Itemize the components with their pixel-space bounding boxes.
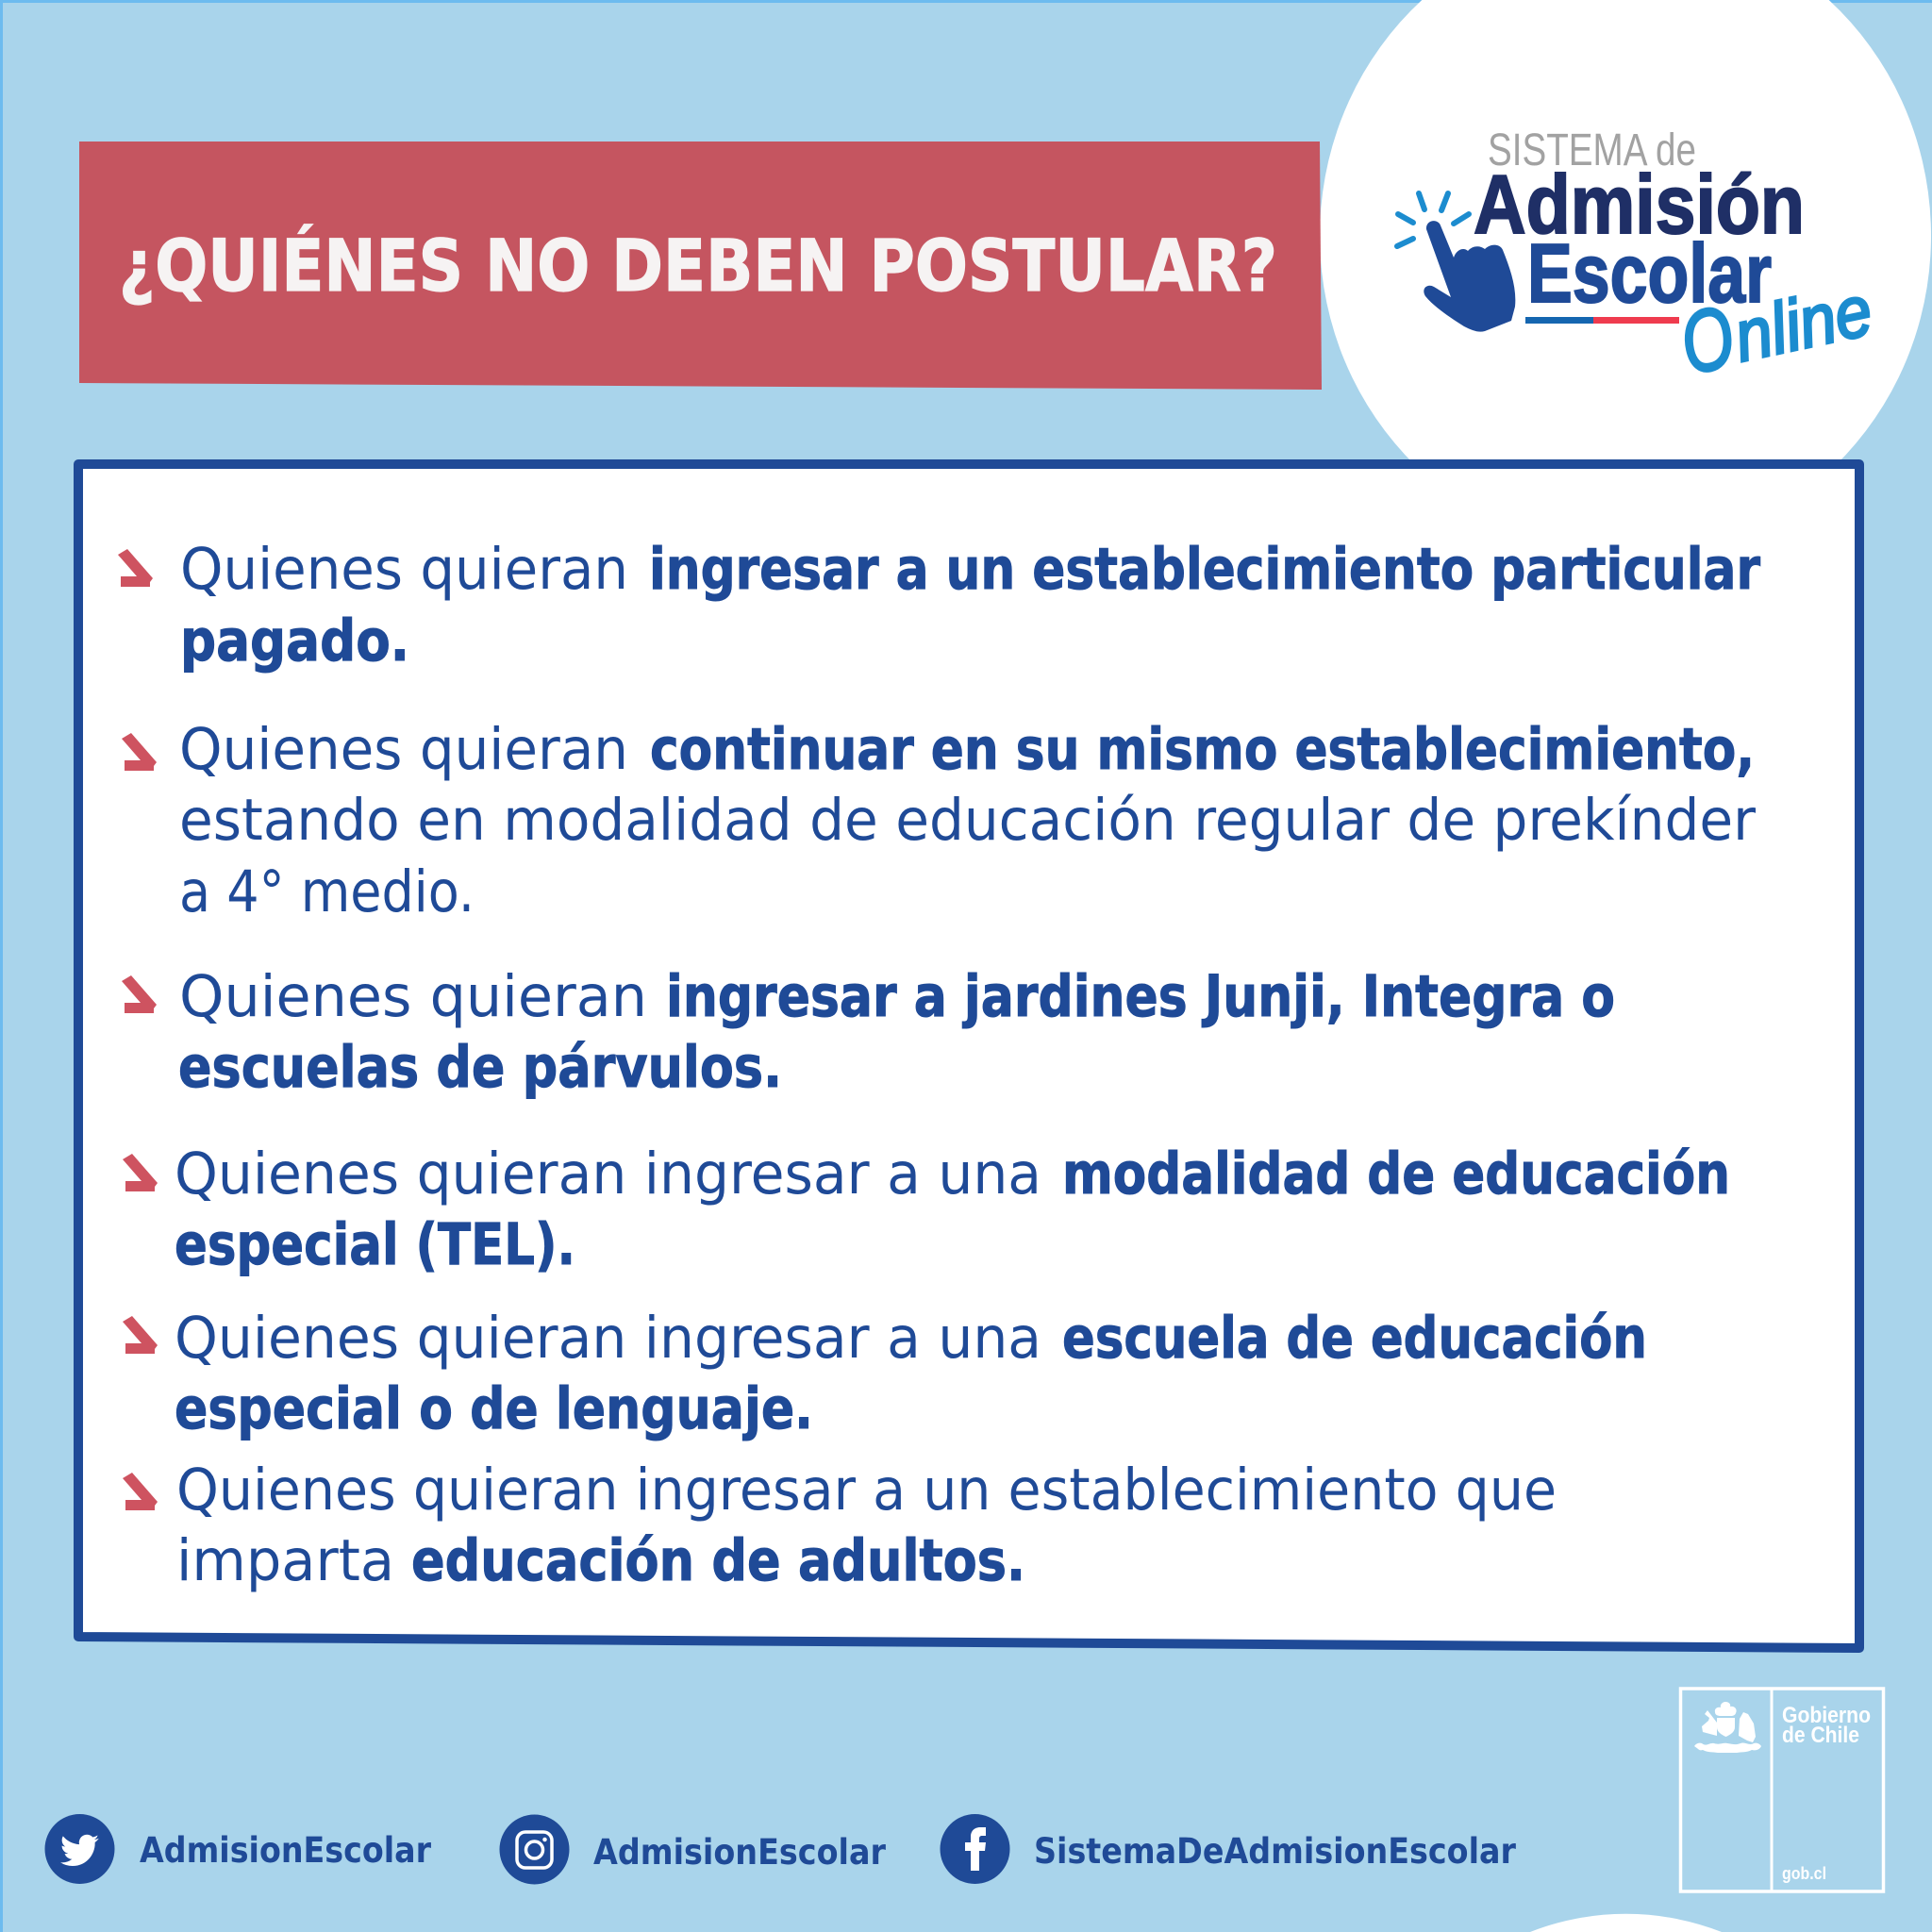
- list item 2: [122, 716, 1757, 925]
- icon: facebook f: [965, 1827, 986, 1871]
- social: facebook: [940, 1814, 1517, 1884]
- text line: Quienes quieran: [179, 716, 628, 783]
- text line: Quienes quieran ingresar a una: [175, 1141, 1041, 1208]
- icon: facebook circle: [940, 1814, 1009, 1884]
- bold text: escuela de educación: [1062, 1305, 1647, 1372]
- arrow icon: [118, 549, 153, 587]
- icon: instagram camera: [517, 1832, 552, 1868]
- arrow icon: [122, 975, 157, 1013]
- arrow icon: [123, 1473, 158, 1510]
- logo text: Sistema de: SISTEMA de: [1488, 125, 1696, 175]
- logo underline blue: [1525, 317, 1593, 324]
- twitter handle: AdmisionEscolar: [140, 1830, 432, 1871]
- text line: Quienes quieran ingresar a una: [175, 1305, 1041, 1372]
- logo text: Online: nline: [1727, 270, 1879, 377]
- logo text: Online: [1673, 259, 1880, 393]
- bold text: educación de adultos.: [411, 1527, 1025, 1594]
- logo divider: [1770, 1689, 1774, 1891]
- logo frame: [1681, 1689, 1883, 1891]
- heading text: ¿QUIÉNES NO DEBEN POSTULAR?: [119, 224, 1277, 308]
- icon: instagram circle: [500, 1815, 570, 1885]
- text line: Quienes quieran: [180, 536, 628, 603]
- logo text: Gobierno: Gobierno: [1782, 1703, 1871, 1728]
- text line 2: estando en modalidad de educación regular de prekínder: [179, 787, 1757, 854]
- list item 6: [123, 1457, 1557, 1594]
- Gobierno de Chile logo: [1681, 1689, 1883, 1891]
- white logo circle: [1320, 0, 1931, 552]
- bold text line 2: escuelas de párvulos.: [178, 1034, 782, 1101]
- logo text: gob.cl: gob.cl: [1782, 1864, 1826, 1883]
- list item 1: [118, 536, 1760, 675]
- bold text: ingresar a jardines Junji, Integra o: [666, 963, 1615, 1030]
- instagram handle: AdmisionEscolar: [593, 1832, 887, 1873]
- social: twitter: [45, 1814, 432, 1884]
- white circle at bottom edge: [1530, 1914, 1722, 1932]
- bold text line 2: especial o de lenguaje.: [175, 1375, 813, 1442]
- logo text: Online: O: [1673, 289, 1742, 393]
- logo text: de Chile: de Chile: [1782, 1723, 1859, 1748]
- icon: twitter circle: [45, 1814, 115, 1884]
- main panel: [78, 464, 1859, 1648]
- coat of arms: [1694, 1702, 1761, 1753]
- icon: pointing hand: [1424, 221, 1515, 332]
- text line 3: a 4° medio.: [179, 858, 475, 925]
- social: instagram: [500, 1815, 887, 1885]
- heading banner: [79, 142, 1322, 390]
- logo text: Admisión: Admisión: [1474, 158, 1805, 251]
- list item 5: [123, 1305, 1647, 1442]
- text line: Quienes quieran ingresar a un establecimiento que: [176, 1457, 1557, 1524]
- logo: Sistema de Admisión Escolar Online: [1397, 125, 1880, 393]
- text line 2: imparta: [176, 1527, 394, 1594]
- icon: twitter bird: [60, 1835, 99, 1866]
- bold text: continuar en su mismo establecimiento,: [650, 716, 1755, 783]
- arrow icon: [123, 1154, 158, 1191]
- bold text: ingresar a un establecimiento particular: [649, 536, 1760, 603]
- logo underline red: [1593, 317, 1679, 324]
- icon: click rays: [1397, 193, 1469, 246]
- arrow icon: [122, 733, 157, 771]
- bold text: modalidad de educación: [1062, 1141, 1730, 1208]
- facebook handle: SistemaDeAdmisionEscolar: [1034, 1831, 1517, 1872]
- list item 3: [122, 963, 1615, 1101]
- list item 4: [123, 1141, 1730, 1278]
- arrow icon: [123, 1316, 158, 1354]
- bold text line 2: especial (TEL).: [175, 1211, 575, 1278]
- logo text: Escolar: Escolar: [1527, 226, 1772, 320]
- bold text line 2: pagado.: [180, 608, 409, 675]
- text line: Quienes quieran: [179, 963, 647, 1030]
